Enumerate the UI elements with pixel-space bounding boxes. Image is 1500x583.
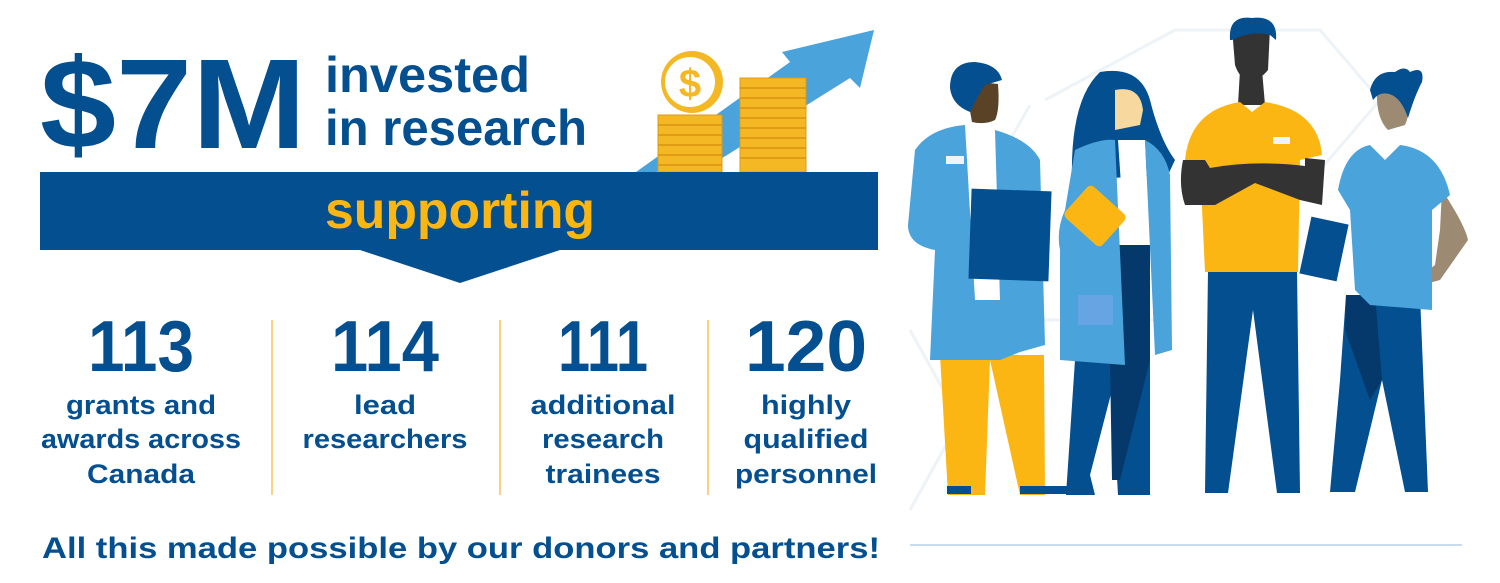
banner: supporting (40, 172, 878, 283)
stat: 114 lead researchers (302, 307, 468, 454)
title: $7M invested in research: invested (325, 47, 530, 103)
title: $7M invested in research: in research (325, 100, 587, 156)
stat: 114 lead researchers: lead (354, 390, 416, 420)
stat: 113 grants and awards: grants and (66, 390, 216, 420)
stat: 120 highly qualified personnel (735, 307, 877, 489)
icon: growth arrow with coins: $ (679, 62, 701, 106)
stat: 113 grants and awards (41, 307, 241, 489)
stat: 111 additional research trainees: trainees (546, 459, 660, 489)
title: $7M invested in research: $7M (40, 33, 306, 176)
person 1 (908, 62, 1068, 495)
stat: 113 grants and awards: 113 (88, 307, 194, 387)
stat: 120 highly qualified personnel: qualified (744, 424, 868, 454)
footer text: All this made possible by our donors and partners! (42, 532, 880, 565)
person 4 (1299, 68, 1468, 492)
stat: 114 lead researchers: researchers (302, 424, 468, 454)
stat: 114 lead researchers: 114 (331, 307, 439, 387)
person 3 (1181, 18, 1325, 493)
dividers (272, 320, 708, 495)
title: $7M invested in research (40, 33, 587, 176)
stat: 111 additional research trainees: additional (530, 390, 676, 420)
stat: 120 highly qualified personnel: personnel (735, 459, 877, 489)
icon: growth arrow with coins (636, 30, 874, 172)
stat: 120 highly qualified personnel: 120 (745, 307, 867, 387)
illustration: health research team (908, 18, 1468, 495)
stat: 111 additional research trainees: research (542, 424, 664, 454)
banner: supporting: supporting (325, 182, 595, 240)
stat: 111 additional research trainees: 111 (558, 307, 648, 387)
background hexagons (910, 30, 1380, 510)
footer line (910, 544, 1462, 546)
stat: 111 additional research trainees (530, 307, 676, 489)
stat: 113 grants and awards: Canada (87, 459, 196, 489)
person 2 (1059, 71, 1175, 495)
stat: 113 grants and awards: awards across (41, 424, 241, 454)
stat: 120 highly qualified personnel: highly (761, 390, 851, 420)
